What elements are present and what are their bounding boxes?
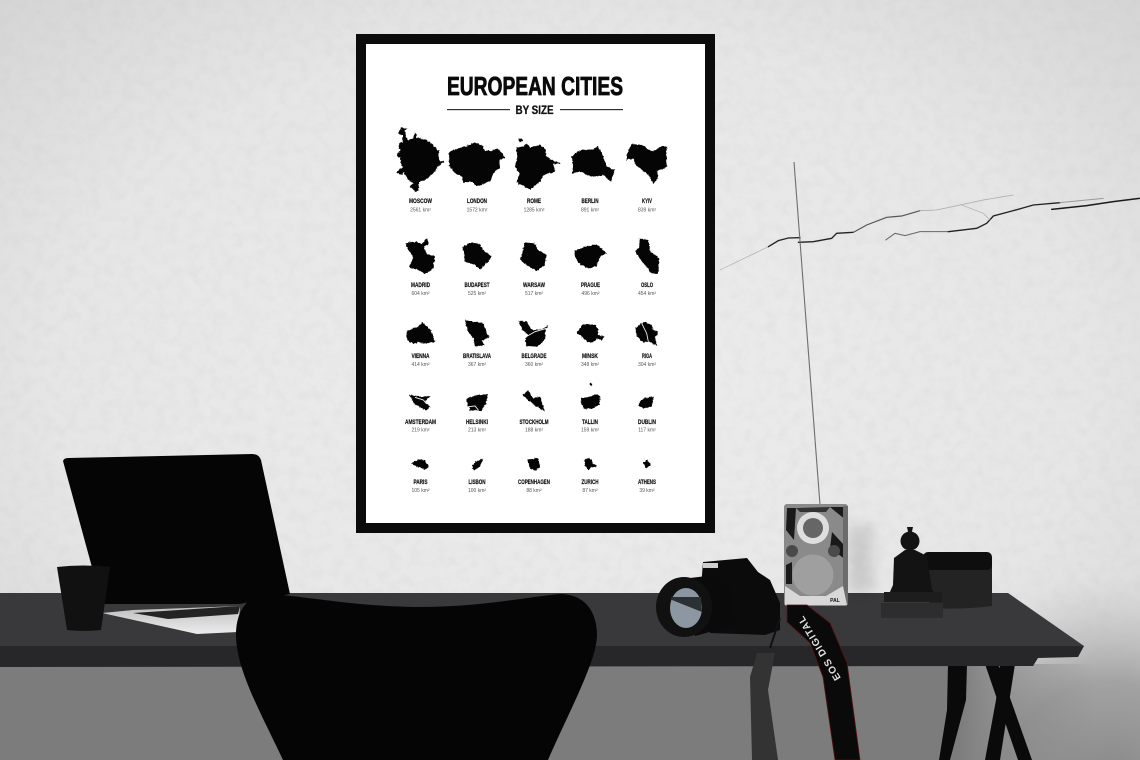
camera body bbox=[700, 558, 780, 635]
label: Belgrade bbox=[522, 353, 547, 368]
city silhouettes rows 1-2 bbox=[397, 128, 667, 274]
label: Berlin: 891 km² bbox=[581, 208, 599, 214]
cup bbox=[57, 566, 110, 631]
label: Rome bbox=[524, 198, 545, 214]
city shape: Moscow bbox=[397, 128, 444, 192]
city shape: Oslo bbox=[635, 238, 659, 273]
label: London bbox=[467, 198, 488, 214]
label: Moscow: MOSCOW bbox=[409, 198, 432, 205]
poster title: EUROPEAN CITIES bbox=[447, 71, 623, 101]
label: Tallin: TALLIN bbox=[582, 419, 598, 426]
city shape: Dublin bbox=[638, 397, 654, 408]
label: Kyiv: 839 km² bbox=[638, 208, 656, 214]
radio bbox=[784, 504, 848, 606]
label: Dublin bbox=[638, 419, 656, 434]
desk legs bbox=[939, 664, 1032, 760]
label: Paris: 105 km² bbox=[411, 488, 430, 494]
city shape: Stockholm bbox=[523, 390, 545, 412]
label: Helsinki: HELSINKI bbox=[466, 419, 488, 426]
label: Athens: ATHENS bbox=[638, 479, 656, 486]
label: Kyiv bbox=[638, 198, 656, 214]
label: Madrid: 604 km² bbox=[411, 291, 430, 297]
label: Amsterdam bbox=[405, 419, 436, 434]
label: Prague: PRAGUE bbox=[581, 282, 600, 289]
label: Berlin: BERLIN bbox=[582, 198, 599, 205]
desk top surface bbox=[0, 593, 1084, 646]
label: Warsaw: WARSAW bbox=[523, 282, 545, 289]
label: Athens: 39 km² bbox=[639, 488, 655, 494]
radio chrome highlights bbox=[786, 507, 846, 584]
label: Budapest bbox=[464, 282, 490, 297]
radio antenna bbox=[794, 162, 820, 505]
label: Oslo: 454 km² bbox=[638, 291, 656, 297]
label: Prague bbox=[581, 282, 600, 297]
label: Vienna: 414 km² bbox=[411, 362, 430, 368]
label: Dublin: 117 km² bbox=[638, 428, 656, 434]
city shape: Amsterdam bbox=[409, 395, 431, 411]
label: Riga: RIGA bbox=[642, 353, 652, 360]
label: Bratislava bbox=[463, 353, 491, 368]
poster frame bbox=[356, 34, 715, 533]
city shape: Athens bbox=[643, 460, 651, 468]
lower wall below the desk bbox=[0, 570, 1140, 760]
label: Paris bbox=[411, 479, 430, 494]
label: Riga: 304 km² bbox=[638, 362, 656, 368]
city shape: Copenhagen bbox=[528, 458, 540, 471]
framed poster bbox=[356, 34, 715, 533]
city shape: Helsinki bbox=[467, 394, 488, 411]
label: Prague: 496 km² bbox=[581, 291, 600, 297]
strap loop bbox=[750, 653, 778, 760]
label: Warsaw bbox=[523, 282, 545, 297]
radio brand: PAL bbox=[830, 598, 840, 604]
label: Stockholm: STOCKHOLM bbox=[520, 419, 549, 426]
city shape: Belgrade bbox=[518, 321, 548, 347]
label: Bratislava: BRATISLAVA bbox=[463, 353, 491, 360]
city shape: London bbox=[449, 142, 505, 186]
wall shadow behind radio bbox=[848, 525, 872, 593]
poster subtitle: BY SIZE bbox=[516, 103, 554, 117]
label: London: 1572 km² bbox=[467, 208, 488, 214]
rivers and gaps in city shapes bbox=[415, 323, 648, 410]
city shape: Madrid bbox=[405, 238, 435, 274]
label: Oslo bbox=[638, 282, 656, 297]
label: Zurich: ZURICH bbox=[582, 479, 599, 486]
laptop screen bbox=[63, 454, 290, 604]
label: Dublin: DUBLIN bbox=[638, 419, 656, 426]
desk front edge bbox=[0, 646, 1084, 667]
city labels bbox=[405, 198, 656, 494]
label: Minsk: 348 km² bbox=[581, 362, 599, 368]
city shape: Lisbon bbox=[472, 458, 483, 470]
city shape: Berlin bbox=[572, 146, 615, 182]
label: Athens bbox=[638, 479, 656, 494]
radio knobs bbox=[786, 545, 798, 557]
label: Madrid bbox=[411, 282, 430, 297]
label: Helsinki bbox=[466, 419, 488, 434]
strap text: EOS DIGITAL bbox=[797, 614, 844, 682]
label: Kyiv: KYIV bbox=[642, 198, 652, 205]
city shape: Vienna bbox=[407, 323, 435, 344]
wall crack bbox=[720, 195, 1139, 270]
label: Budapest: 525 km² bbox=[468, 291, 486, 297]
label: Zurich bbox=[582, 479, 599, 494]
city shape: Prague bbox=[574, 244, 607, 268]
label: Madrid: MADRID bbox=[411, 282, 430, 289]
label: Moscow bbox=[409, 198, 432, 214]
city silhouettes rows 3-5 bbox=[407, 320, 658, 471]
label: Paris: PARIS bbox=[414, 479, 428, 486]
label: London: LONDON bbox=[467, 198, 487, 205]
label: Amsterdam: 219 km² bbox=[411, 428, 430, 434]
camera strap bbox=[750, 605, 860, 760]
label: Minsk: MINSK bbox=[582, 353, 598, 360]
camera lens glass bbox=[670, 588, 702, 628]
city shape: Tallin bbox=[581, 383, 601, 409]
city shape: Zurich bbox=[584, 458, 597, 470]
label: Minsk bbox=[581, 353, 599, 368]
label: Amsterdam: AMSTERDAM bbox=[405, 419, 436, 426]
city shape: Warsaw bbox=[520, 242, 547, 271]
label: Lisbon bbox=[468, 479, 486, 494]
label: Oslo: OSLO bbox=[641, 282, 653, 289]
laptop keyboard bbox=[133, 606, 240, 619]
label: Lisbon: LISBON bbox=[468, 479, 486, 486]
desk bbox=[0, 593, 1084, 667]
city shape: Bratislava bbox=[465, 320, 490, 347]
label: Tallin: 159 km² bbox=[581, 428, 599, 434]
label: Rome: ROME bbox=[527, 198, 541, 205]
radio speaker bbox=[792, 554, 834, 596]
chair bbox=[236, 594, 597, 760]
radio body bbox=[784, 504, 848, 606]
city shape: Minsk bbox=[577, 324, 604, 343]
radio top dial bbox=[797, 512, 829, 544]
label: Lisbon: 100 km² bbox=[468, 488, 486, 494]
label: Stockholm bbox=[520, 419, 549, 434]
camera lens hood bbox=[656, 577, 712, 637]
label: Bratislava: 367 km² bbox=[468, 362, 486, 368]
label: Budapest: BUDAPEST bbox=[464, 282, 490, 289]
round box bbox=[923, 552, 992, 609]
label: Stockholm: 188 km² bbox=[525, 428, 543, 434]
camera brand plate bbox=[703, 563, 718, 568]
camera bbox=[656, 558, 780, 637]
label: Helsinki: 213 km² bbox=[468, 428, 486, 434]
label: Belgrade: 360 km² bbox=[525, 362, 543, 368]
label: Berlin bbox=[581, 198, 599, 214]
label: Copenhagen: COPENHAGEN bbox=[518, 479, 550, 486]
label: Vienna bbox=[411, 353, 430, 368]
city shape: Riga bbox=[635, 322, 658, 346]
buddha statue bbox=[881, 527, 943, 618]
label: Vienna: VIENNA bbox=[412, 353, 430, 360]
city shape: Kyiv bbox=[626, 144, 667, 184]
label: Copenhagen: 88 km² bbox=[526, 488, 542, 494]
label: Rome: 1285 km² bbox=[524, 208, 545, 214]
laptop base bbox=[102, 606, 240, 634]
laptop bbox=[63, 454, 290, 634]
city shape: Budapest bbox=[463, 242, 492, 269]
label: Moscow: 2561 km² bbox=[410, 208, 431, 214]
label: Warsaw: 517 km² bbox=[525, 291, 543, 297]
city shape: Paris bbox=[412, 459, 429, 469]
label: Riga bbox=[638, 353, 656, 368]
camera lens barrel bbox=[690, 575, 735, 636]
city shape: Rome bbox=[515, 138, 562, 189]
label: Copenhagen bbox=[518, 479, 550, 494]
radio bottom plate bbox=[785, 586, 847, 605]
label: Zurich: 87 km² bbox=[582, 488, 598, 494]
label: Belgrade: BELGRADE bbox=[522, 353, 547, 360]
poster paper bbox=[366, 44, 705, 523]
label: Tallin bbox=[581, 419, 599, 434]
